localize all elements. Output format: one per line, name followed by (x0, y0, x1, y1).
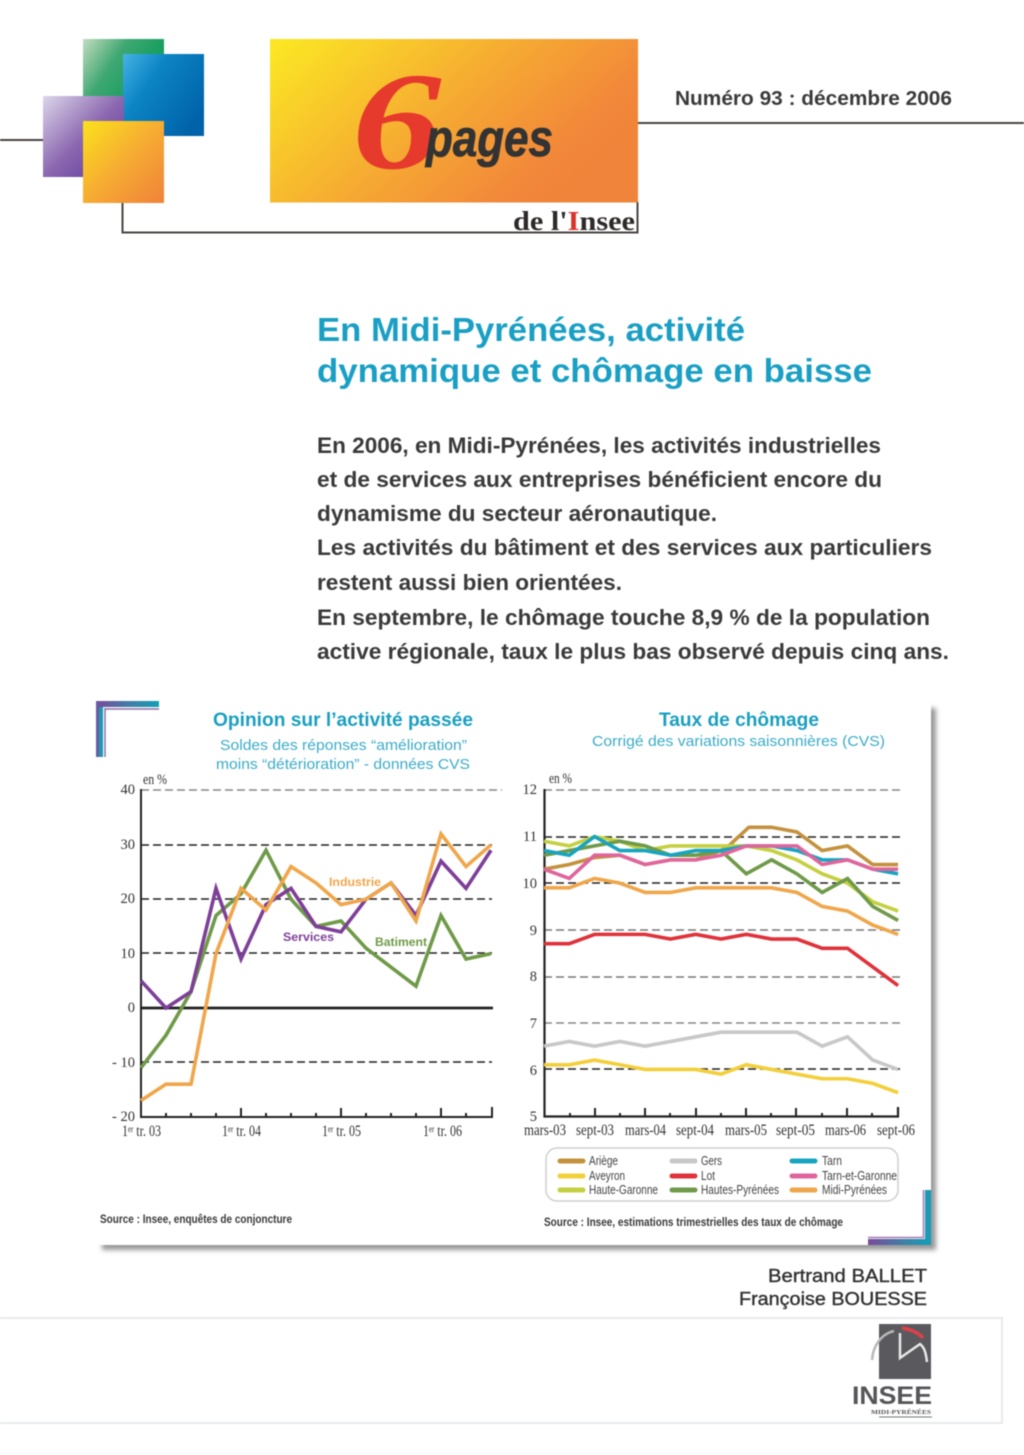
left chart x axis labels: tr. 05 (333, 1123, 361, 1140)
right chart y axis labels: 12 (522, 782, 537, 798)
logo: INSEE Midi-Pyrénées (852, 1324, 932, 1417)
left chart x axis labels: er (328, 1124, 333, 1134)
right chart heading: Taux de chômage (659, 710, 819, 731)
summary text block (317, 433, 949, 664)
authors: Bertrand BALLET (768, 1265, 927, 1286)
series: Midi-Pyrénées (544, 878, 898, 934)
right chart axes (544, 789, 898, 1116)
left chart x axis labels: tr. 03 (133, 1123, 161, 1140)
left chart x axis labels: er (228, 1124, 233, 1134)
legend: Hautes-Pyrénées (701, 1183, 779, 1197)
summary text block: En septembre, le chômage touche 8,9 % de la population (317, 605, 930, 630)
right chart heading: Corrigé des variations saisonnières (CVS) (592, 734, 885, 750)
right chart x axis labels: mars-06 (825, 1122, 866, 1139)
series: Hautes-Pyrénées (544, 841, 898, 920)
logo: overlapping coloured squares (43, 39, 204, 203)
right chart y axis labels: 8 (530, 969, 537, 985)
series: Tarn (544, 837, 898, 874)
legend (546, 1148, 898, 1201)
right chart y axis labels: 6 (530, 1063, 537, 1079)
logo: INSEE Midi-Pyrénées: MIDI-PYRÉNÉES (871, 1408, 932, 1416)
right chart x axis labels: mars-05 (725, 1122, 767, 1139)
series: Services (141, 850, 491, 1008)
authors: Françoise BOUESSE (739, 1288, 927, 1309)
left chart axes (141, 789, 493, 1117)
left chart x axis labels: 1 (423, 1123, 431, 1140)
legend: Aveyron (589, 1169, 625, 1183)
right chart data series (544, 827, 898, 1093)
right chart y axis labels: 5 (530, 1109, 537, 1125)
right chart x axis labels: sept-06 (877, 1122, 915, 1139)
corner ornament top-left (96, 701, 159, 757)
left chart x axis labels (122, 1123, 462, 1140)
series labels: Services (283, 930, 334, 944)
right chart grid lines (544, 790, 901, 1069)
series: Ariège (544, 827, 898, 869)
left chart y axis labels (112, 782, 135, 1125)
panel: charts card (96, 701, 936, 1250)
right chart x axis labels (524, 1122, 915, 1139)
logo banner: 6 pages de l'Insee: 6 (352, 44, 442, 198)
right chart y axis labels: 9 (530, 923, 537, 939)
right chart heading (592, 710, 885, 750)
legend: Haute-Garonne (589, 1183, 658, 1197)
left chart x axis labels: 1 (222, 1123, 230, 1140)
corner ornament bottom-right (868, 1190, 931, 1245)
main title: En Midi-Pyrénées, activité (317, 311, 745, 348)
footer box (0, 1318, 1002, 1423)
right chart x axis labels: sept-03 (576, 1122, 614, 1139)
right chart unit: en % (549, 771, 572, 787)
summary text block: Les activités du bâtiment et des services aux particuliers (317, 535, 932, 560)
summary text block: En 2006, en Midi-Pyrénées, les activités industrielles (317, 433, 881, 458)
series: Gers (544, 1032, 898, 1069)
series: Industrie (141, 834, 491, 1100)
right chart y axis labels (522, 782, 537, 1125)
left chart x axis labels: 1 (122, 1123, 130, 1140)
left chart grid lines (141, 790, 502, 1062)
right chart x axis labels: mars-03 (524, 1122, 566, 1139)
right chart y axis labels: 11 (523, 829, 537, 845)
logo banner: 6 pages de l'Insee: pages (424, 110, 553, 168)
left chart heading: Opinion sur l’activité passée (213, 710, 473, 731)
legend: Tarn (822, 1154, 842, 1168)
legend: Midi-Pyrénées (822, 1183, 887, 1197)
logo banner: 6 pages de l'Insee: de l'Insee (513, 206, 635, 236)
summary text block: restent aussi bien orientées. (317, 570, 622, 595)
summary text block: et de services aux entreprises bénéficient encore du (317, 467, 882, 492)
left chart heading (213, 710, 473, 773)
logo banner: 6 pages de l'Insee (270, 39, 638, 236)
left chart heading: moins “détérioration” - données CVS (216, 757, 470, 773)
header rule lines (0, 123, 1024, 232)
legend: Ariège (589, 1154, 618, 1168)
line chart: opinion sur l'activité passée (112, 772, 502, 1140)
left chart unit: en % (143, 772, 167, 788)
series: Lot (544, 934, 898, 986)
right chart x axis labels: mars-04 (625, 1122, 666, 1139)
main title: dynamique et chômage en baisse (317, 352, 872, 389)
series labels (283, 875, 427, 949)
legend: Lot (701, 1169, 715, 1183)
logo: INSEE Midi-Pyrénées: INSEE (852, 1382, 932, 1410)
right chart x axis labels: sept-05 (776, 1122, 815, 1139)
line chart: taux de chômage (522, 771, 915, 1139)
authors (739, 1265, 927, 1309)
right chart y axis labels: 7 (530, 1016, 537, 1032)
left chart y axis labels: 0 (128, 1000, 135, 1016)
series labels: Batiment (375, 935, 427, 949)
main title (317, 311, 872, 389)
left chart x axis labels: er (429, 1124, 434, 1134)
left chart x axis labels: tr. 04 (233, 1123, 261, 1140)
series: Haute-Garonne (544, 837, 898, 911)
left chart heading: Soldes des réponses “amélioration” (220, 738, 467, 754)
series: Aveyron (544, 1060, 898, 1093)
summary text block: dynamisme du secteur aéronautique. (317, 501, 717, 526)
right chart y axis labels: 10 (522, 876, 537, 892)
left chart y axis labels: 20 (120, 891, 135, 907)
legend: Gers (701, 1154, 722, 1168)
series: Tarn-et-Garonne (544, 846, 898, 878)
right chart source: Source : Insee, estimations trimestrielles des taux de chômage (544, 1215, 843, 1229)
left chart y axis labels: 10 (120, 946, 135, 962)
left chart y axis labels: 30 (120, 837, 135, 853)
left chart y axis labels: - 10 (112, 1055, 135, 1071)
left chart x axis labels: tr. 06 (434, 1123, 462, 1140)
series: Bâtiment (141, 850, 491, 1068)
left chart source: Source : Insee, enquêtes de conjoncture (100, 1212, 292, 1226)
left chart x axis labels: er (128, 1124, 133, 1134)
left chart y axis labels: 40 (120, 782, 135, 798)
left chart y axis labels: - 20 (112, 1109, 135, 1125)
left chart data series (141, 834, 491, 1100)
legend: Tarn-et-Garonne (822, 1169, 897, 1183)
left chart x axis labels: 1 (322, 1123, 330, 1140)
issue number: Numéro 93 : décembre 2006 (675, 87, 952, 110)
series labels: Industrie (329, 875, 381, 889)
summary text block: active régionale, taux le plus bas observé depuis cinq ans. (317, 639, 949, 664)
right chart x axis labels: sept-04 (676, 1122, 714, 1139)
